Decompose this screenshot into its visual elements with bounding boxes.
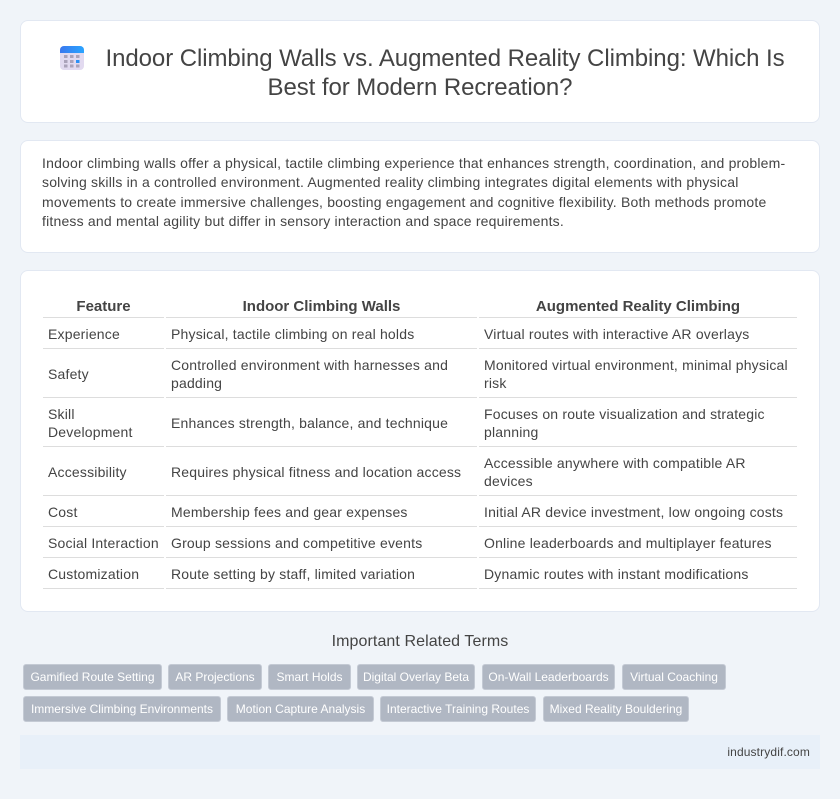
- row: Skill Development: [48, 406, 765, 440]
- tag: Mixed Reality Bouldering: [550, 702, 682, 716]
- text block: description: movements to create immersive challenges, boosting engagement and cognitive flexibility. Both methods promote: [42, 194, 766, 210]
- row: Skill Development: Skill: [48, 406, 75, 422]
- table header: [76, 298, 740, 315]
- row: Accessibility: Accessibility: [48, 464, 127, 480]
- tag: [380, 696, 536, 722]
- row: Experience: Experience: [48, 326, 120, 342]
- row: Accessibility: Accessible anywhere with compatible AR: [484, 455, 746, 471]
- text block: description: solving skills in a controlled environment. Augmented reality climbing integrates digital elements with physical: [42, 174, 739, 190]
- row: Safety: risk: [484, 375, 507, 391]
- panel: footer: [20, 735, 820, 769]
- row: Cost: Membership fees and gear expenses: [171, 504, 408, 520]
- tag: Smart Holds: [276, 670, 343, 684]
- tag: Immersive Climbing Environments: [31, 702, 213, 716]
- tag: [23, 664, 162, 690]
- heading: Important Related Terms: Important Related Terms: [332, 633, 508, 650]
- table header: Indoor Climbing Walls: [243, 298, 400, 315]
- row: Skill Development: planning: [484, 424, 538, 440]
- row: Experience: Virtual routes with interactive AR overlays: [484, 326, 749, 342]
- row: Skill Development: Enhances strength, balance, and technique: [171, 415, 448, 431]
- row: Customization: Customization: [48, 566, 139, 582]
- row: Skill Development: Development: [48, 424, 133, 440]
- row: Cost: Cost: [48, 504, 78, 520]
- row: Accessibility: [48, 455, 746, 489]
- icon: calendar: [60, 46, 84, 70]
- row: Customization: Dynamic routes with instant modifications: [484, 566, 749, 582]
- panel: title header: [20, 20, 820, 123]
- table header: Feature: [76, 298, 131, 315]
- tag: [23, 696, 221, 722]
- row: Safety: Controlled environment with harnesses and: [171, 357, 448, 373]
- row: Skill Development: Focuses on route visualization and strategic: [484, 406, 765, 422]
- row: Social Interaction: [48, 535, 772, 551]
- row: Social Interaction: Social Interaction: [48, 535, 159, 551]
- text block: description: [42, 155, 785, 229]
- row: Customization: Route setting by staff, limited variation: [171, 566, 415, 582]
- tag: Virtual Coaching: [630, 670, 718, 684]
- row: Safety: Safety: [48, 366, 89, 382]
- row: Accessibility: devices: [484, 473, 533, 489]
- text: site name: industrydif.com: [727, 745, 810, 759]
- row: Safety: [48, 357, 788, 391]
- text block: description: fitness and mental agility but differ in sensory interaction and space requirements.: [42, 213, 564, 229]
- row: Cost: [48, 504, 783, 520]
- tag: Gamified Route Setting: [30, 670, 155, 684]
- row: Experience: Physical, tactile climbing on real holds: [171, 326, 414, 342]
- tag: AR Projections: [175, 670, 255, 684]
- text block: description: Indoor climbing walls offer a physical, tactile climbing experience that enhances strength, coordination, and problem-: [42, 155, 785, 171]
- tag: Interactive Training Routes: [387, 702, 529, 716]
- panel: description: [20, 140, 820, 253]
- row: Social Interaction: Group sessions and competitive events: [171, 535, 422, 551]
- row: Safety: padding: [171, 375, 222, 391]
- panel: related terms tags: [23, 664, 726, 722]
- tag: [357, 664, 475, 690]
- title: Best for Modern Recreation?: [268, 74, 572, 101]
- row: Accessibility: Requires physical fitness and location access: [171, 464, 461, 480]
- row: Social Interaction: Online leaderboards and multiplayer features: [484, 535, 772, 551]
- row: Customization: [48, 566, 749, 582]
- tag: [227, 696, 374, 722]
- tag: Motion Capture Analysis: [236, 702, 365, 716]
- row: Cost: Initial AR device investment, low ongoing costs: [484, 504, 783, 520]
- tag: [482, 664, 615, 690]
- table header: Augmented Reality Climbing: [536, 298, 740, 315]
- tag: [268, 664, 351, 690]
- tag: [622, 664, 726, 690]
- row: Safety: Monitored virtual environment, minimal physical: [484, 357, 788, 373]
- tag: On-Wall Leaderboards: [488, 670, 609, 684]
- tag: [543, 696, 689, 722]
- row: Experience: [48, 326, 749, 342]
- tag: [168, 664, 262, 690]
- panel: comparison table: [20, 270, 820, 612]
- title: [105, 45, 785, 101]
- tag: Digital Overlay Beta: [363, 670, 469, 684]
- title: Indoor Climbing Walls vs. Augmented Reality Climbing: Which Is: [105, 45, 785, 72]
